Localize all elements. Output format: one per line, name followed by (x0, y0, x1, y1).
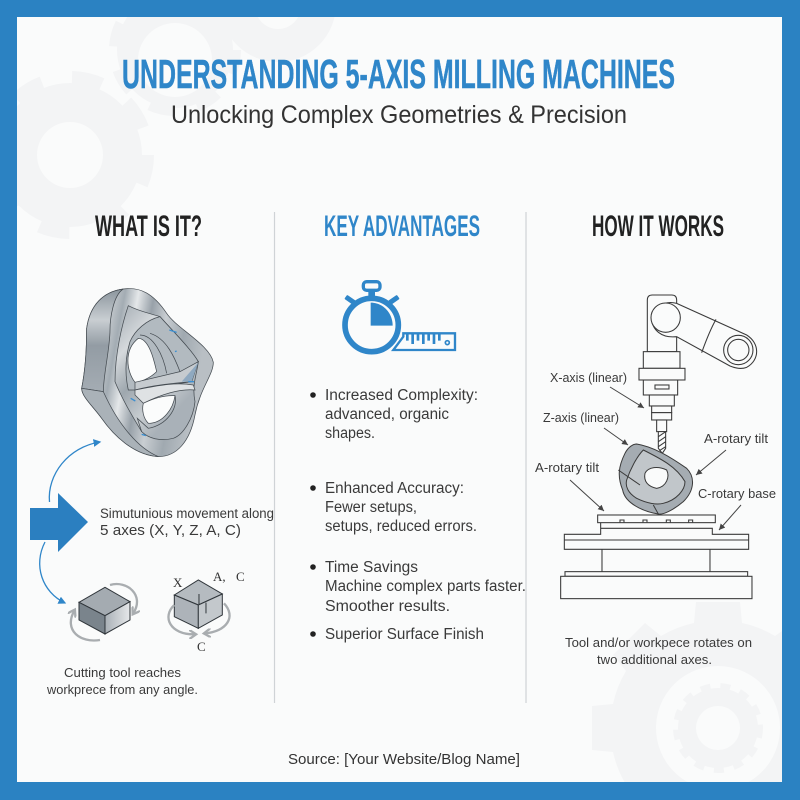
bullet: increased complexity: shapes. (325, 425, 375, 442)
cube axis letters: C (236, 569, 245, 584)
how it works caption (565, 635, 752, 667)
bullet: superior surface finish: Superior Surface Finish (325, 626, 484, 643)
axis labels: X-axis (linear) (550, 370, 627, 385)
how it works caption: two additional axes. (597, 652, 712, 667)
panel: what is it (30, 210, 274, 697)
axis labels: C-rotary base (698, 486, 776, 501)
right cube with axis labels (168, 580, 230, 634)
cube axis letters: C (197, 639, 206, 654)
simultaneous movement text (100, 506, 274, 539)
background gears (39, 284, 740, 638)
axis labels: Z-axis (linear) (543, 410, 619, 425)
bullet: time savings (310, 559, 526, 615)
simultaneous movement text: 5 axes (X, Y, Z, A, C) (100, 522, 241, 539)
machine table and base (561, 515, 752, 599)
machine spindle and arm (639, 295, 757, 453)
cube axis letters: A, (213, 569, 226, 584)
axis labels: A-rotary tilt (535, 460, 599, 475)
curved arrow down to cube (40, 542, 65, 603)
subtitle: Unlocking Complex Geometries & Precision (171, 101, 627, 129)
column dividers (274, 212, 526, 703)
left cube with rotation arrows (71, 584, 137, 640)
bullet: time savings: Time Savings (325, 559, 418, 576)
cube axis letters: X (173, 575, 183, 590)
workpiece on table (618, 444, 693, 514)
bullet: enhanced accuracy (310, 480, 477, 535)
axis labels (535, 370, 776, 501)
heading: what is it: WHAT IS IT? (95, 210, 202, 243)
panel: key advantages (310, 210, 526, 643)
curved arrow up to workpiece (49, 442, 100, 502)
source line: Source: [Your Website/Blog Name] (288, 751, 520, 768)
bullet: time savings: Smoother results. (325, 598, 450, 615)
cutting tool caption: workprece from any angle. (46, 682, 198, 697)
bullet: enhanced accuracy: Fewer setups, (325, 499, 417, 516)
bullet: increased complexity: advanced, organic (325, 406, 449, 423)
cube axis letters (173, 569, 245, 654)
icon: stopwatch and ruler (344, 282, 455, 352)
axis labels: A-rotary tilt (704, 431, 768, 446)
big blue arrow (30, 493, 88, 552)
bullet: time savings: Machine complex parts faster. (325, 578, 526, 595)
how it works caption: Tool and/or workpece rotates on (565, 635, 752, 650)
cutting tool caption (46, 665, 198, 697)
bullet: increased complexity (310, 387, 478, 442)
bullet: enhanced accuracy: Enhanced Accuracy: (325, 480, 464, 497)
cutting tool caption: Cutting tool reaches (64, 665, 182, 680)
simultaneous movement text: Simutunious movement along (100, 506, 274, 521)
pointer arrows (570, 387, 741, 530)
bullet: increased complexity: Increased Complexity: (325, 387, 478, 404)
bullet: enhanced accuracy: setups, reduced errors. (325, 518, 477, 535)
panel: how it works (535, 210, 776, 667)
heading: key advantages: KEY ADVANTAGES (324, 210, 480, 243)
metal workpiece illustration (82, 289, 213, 457)
